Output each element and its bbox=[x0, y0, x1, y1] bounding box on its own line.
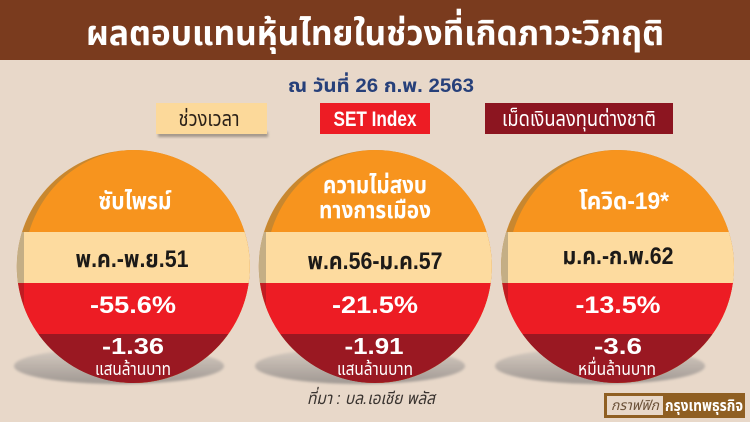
panel: covid circle bbox=[495, 150, 736, 384]
panel: political unrest circle bbox=[255, 150, 494, 384]
panel: subprime circle bbox=[14, 150, 252, 384]
unit: แสนล้านบาท bbox=[337, 359, 413, 379]
period: ม.ค.-ก.พ.62 bbox=[562, 243, 674, 270]
panel: political unrest circle: ทางการเมือง bbox=[319, 197, 431, 224]
SET index change: -13.5% bbox=[576, 292, 660, 319]
foreign flow: -1.91 bbox=[344, 333, 404, 359]
unit: หมื่นล้านบาท bbox=[578, 356, 656, 379]
date subtitle: ณ วันที่ 26 ก.พ. 2563 bbox=[288, 72, 474, 97]
legend: period bbox=[156, 103, 268, 137]
legend: period: ช่วงเวลา bbox=[178, 107, 240, 131]
legend: SET index: SET Index bbox=[334, 108, 417, 131]
foreign flow: -3.6 bbox=[594, 333, 642, 359]
title: ผลตอบแทนหุ้นไทยในช่วงที่เกิดภาวะวิกฤติ bbox=[86, 8, 664, 54]
unit: แสนล้านบาท bbox=[95, 359, 171, 379]
crisis name: โควิด-19* bbox=[579, 188, 670, 215]
source note: ที่มา : บล.เอเชีย พลัส bbox=[307, 386, 437, 408]
crisis name: ซับไพรม์ bbox=[98, 188, 172, 215]
logo badge bbox=[604, 393, 745, 418]
header band bbox=[0, 0, 750, 60]
legend: foreign flows: เม็ดเงินลงทุนต่างชาติ bbox=[502, 106, 656, 132]
legend bbox=[156, 103, 673, 137]
SET index change: -21.5% bbox=[332, 292, 418, 319]
foreign flow: -1.36 bbox=[102, 333, 164, 359]
legend: foreign flows bbox=[485, 103, 673, 134]
legend: SET index bbox=[320, 103, 430, 134]
SET index change: -55.6% bbox=[90, 292, 176, 319]
period: พ.ค.-พ.ย.51 bbox=[76, 246, 188, 273]
crisis name: ความไม่สงบ bbox=[323, 171, 427, 199]
period: พ.ค.56-ม.ค.57 bbox=[308, 248, 442, 275]
logo badge: กราฟฟิก bbox=[611, 397, 660, 413]
